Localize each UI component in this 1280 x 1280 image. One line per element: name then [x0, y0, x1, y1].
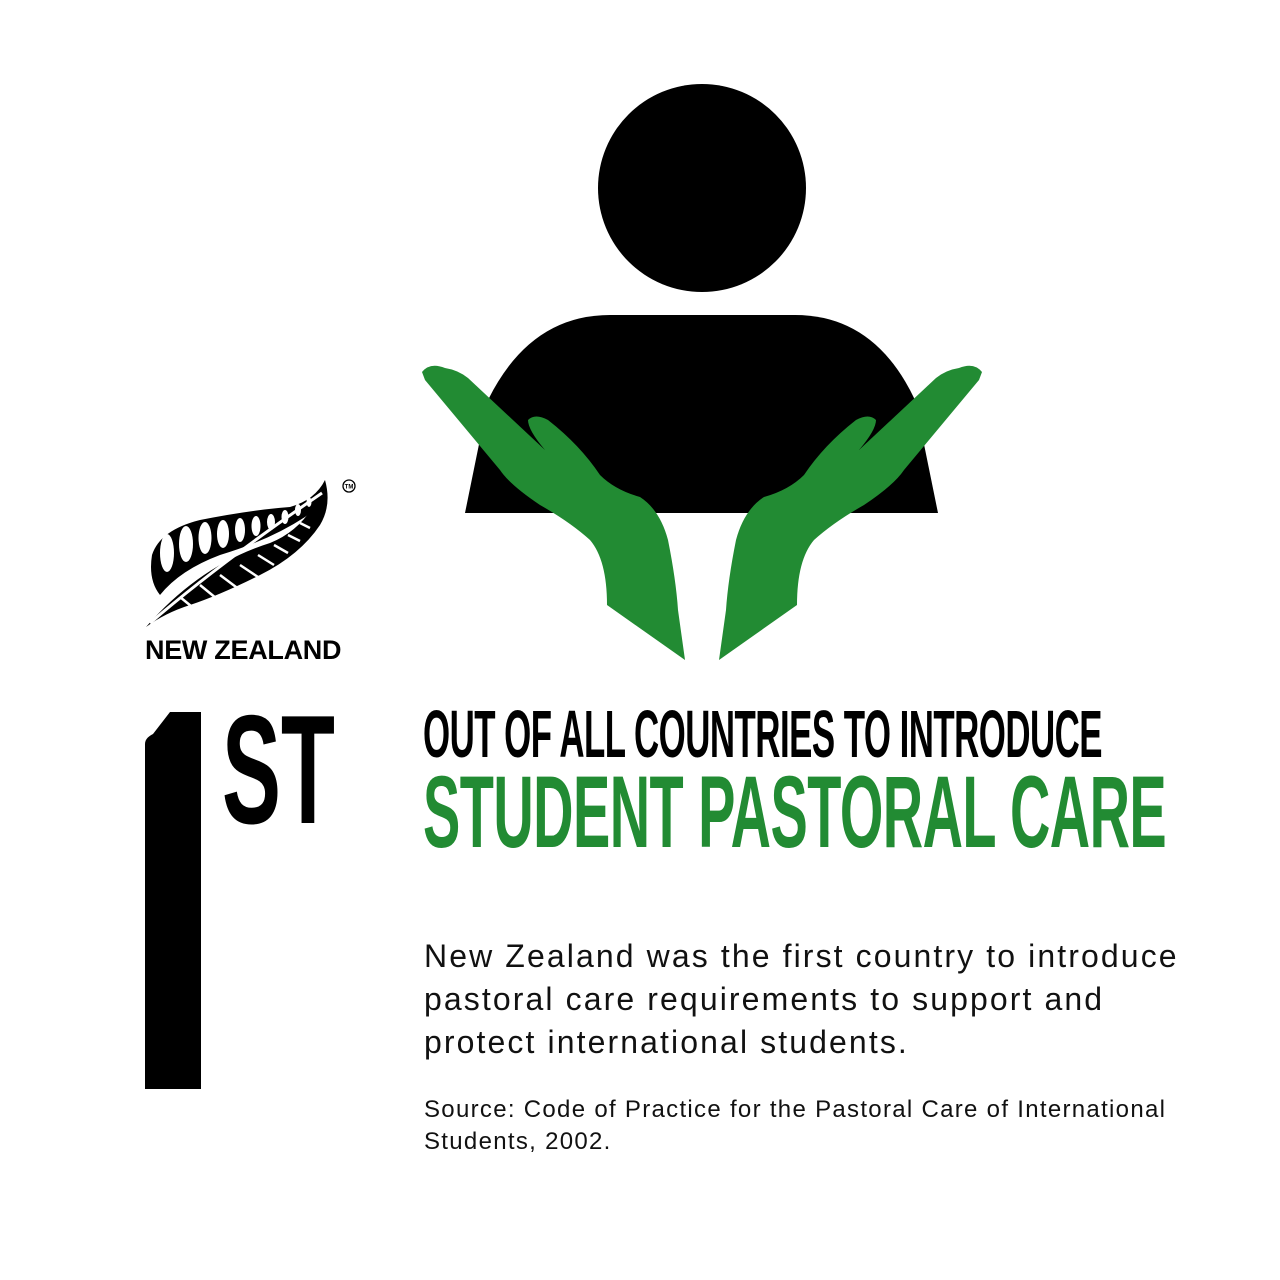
big number 1 — [145, 712, 201, 1089]
description text — [424, 938, 1179, 1060]
description text: protect international students. — [424, 1024, 909, 1060]
superscript ST: ST — [222, 683, 335, 856]
heading line 1: OUT OF ALL COUNTRIES TO INTRODUCE — [423, 697, 1102, 772]
trademark — [343, 480, 355, 492]
trademark: TM — [345, 484, 353, 490]
source note — [424, 1096, 1166, 1155]
person body — [465, 315, 938, 513]
person head — [598, 84, 806, 292]
heading line 2: STUDENT PASTORAL CARE — [423, 755, 1166, 869]
right hand — [719, 366, 982, 660]
description text: pastoral care requirements to support and — [424, 981, 1104, 1017]
fern — [146, 480, 328, 627]
logo text: NEW ZEALAND — [145, 635, 341, 665]
logo: silver fern New Zealand — [145, 479, 356, 665]
icon: person with caring hands — [422, 84, 982, 660]
description text: New Zealand was the first country to introduce — [424, 938, 1179, 974]
source note: Source: Code of Practice for the Pastoral Care of International — [424, 1096, 1166, 1123]
left hand — [422, 366, 685, 660]
source note: Students, 2002. — [424, 1128, 612, 1155]
